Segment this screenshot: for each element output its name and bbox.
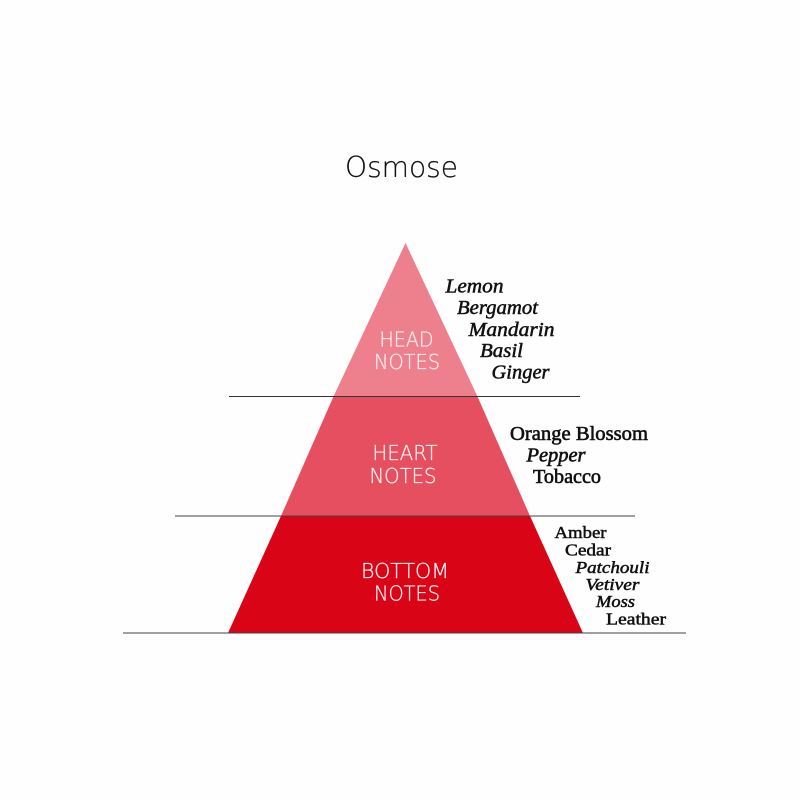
list: bottom ingredients: Moss (595, 592, 635, 611)
list: bottom ingredients: Amber (554, 523, 607, 542)
list: bottom ingredients: Patchouli (574, 558, 650, 577)
list: head ingredients (444, 276, 554, 384)
label: head notes (374, 328, 440, 374)
list: head ingredients: Lemon (444, 276, 504, 298)
pyramid: heart tier (281, 396, 530, 516)
label: bottom notes (361, 559, 449, 606)
list: bottom ingredients: Leather (606, 610, 666, 628)
list: bottom ingredients (554, 523, 666, 628)
divider: head and heart (229, 396, 580, 398)
list: head ingredients: Bergamot (457, 298, 539, 319)
list: heart ingredients (510, 424, 648, 488)
label: bottom notes: BOTTOM (361, 559, 449, 583)
label: heart notes: NOTES (370, 464, 436, 488)
pyramid: bottom tier (228, 516, 583, 633)
label: heart notes (370, 441, 438, 488)
list: heart ingredients: Orange Blossom (510, 424, 648, 445)
label: head notes: HEAD (380, 328, 434, 352)
title: Osmose (345, 151, 458, 184)
list: bottom ingredients: Vetiver (586, 575, 640, 594)
list: heart ingredients: Pepper (525, 446, 586, 466)
baseline (123, 632, 686, 634)
list: heart ingredients: Tobacco (533, 467, 601, 488)
list: head ingredients: Mandarin (467, 320, 554, 341)
pyramid: head tier (334, 243, 478, 396)
list: head ingredients: Basil (480, 341, 523, 362)
divider: heart and bottom (175, 515, 635, 517)
label: bottom notes: NOTES (374, 582, 440, 606)
list: bottom ingredients: Cedar (565, 540, 611, 560)
list: head ingredients: Ginger (492, 362, 550, 384)
label: head notes: NOTES (374, 350, 440, 374)
label: heart notes: HEART (372, 441, 438, 465)
